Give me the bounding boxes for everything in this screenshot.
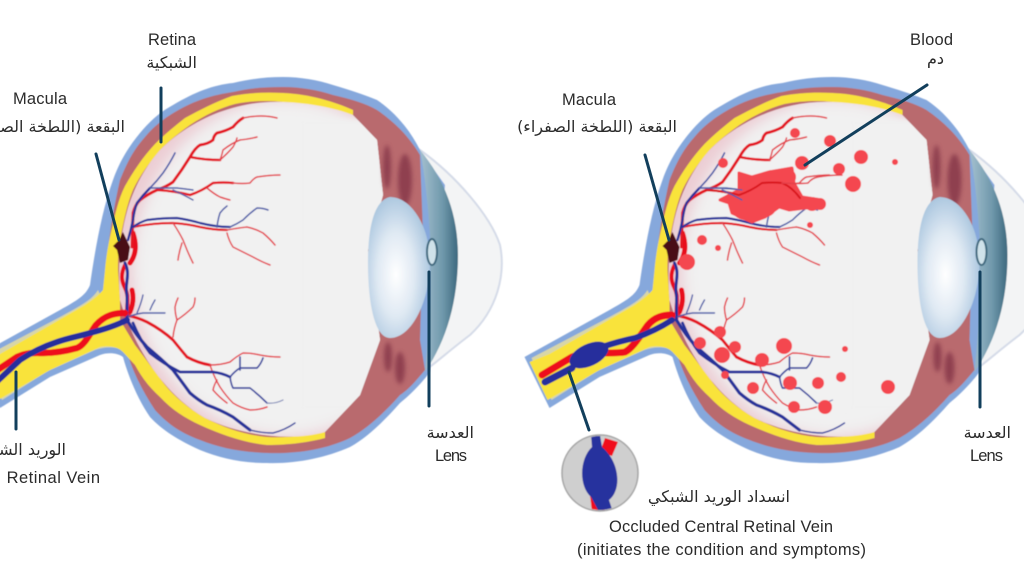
label: retina: الشبكية [146,53,197,72]
leader lines [16,85,980,430]
label: lens: العدسة [964,423,1011,442]
label: retina: Retina [148,31,197,49]
label: blood: دم [927,49,944,68]
label: lens: Lens [435,447,467,465]
label: central retinal vein [0,440,100,487]
blood spots [679,128,898,414]
icon: occluded vein inset [562,435,638,512]
label: blood [910,31,953,68]
eye cross-section [0,77,502,463]
label: macula: Macula [562,91,617,109]
label: lens: Lens [970,447,1003,465]
label: blood: Blood [910,31,953,49]
label: macula: Macula [13,90,68,108]
label: macula [517,91,677,137]
label: retina [146,31,197,72]
label: occluded vein [577,487,866,559]
nerve vessels with occlusion [542,315,672,382]
nerve vessels [0,313,127,388]
label: occluded vein: (initiates the condition and symptoms) [577,541,866,559]
vessels over blood [700,175,842,200]
label: occluded vein: انسداد الوريد الشبكي [648,487,790,507]
labels: left eye [0,31,474,487]
labels: right eye [517,31,1011,559]
panel: normal eye [0,77,502,463]
label: lens: العدسة [427,423,474,442]
eye cross-section [524,77,1024,463]
label: occluded vein: Occluded Central Retinal Vein [609,518,833,536]
panel: occluded eye [524,77,1024,463]
label: macula [0,90,125,137]
label: lens [427,423,474,465]
label: lens [964,423,1011,465]
hemorrhage blob [720,168,826,222]
label: macula: البقعة (اللطخة الصفراء) [517,117,677,137]
